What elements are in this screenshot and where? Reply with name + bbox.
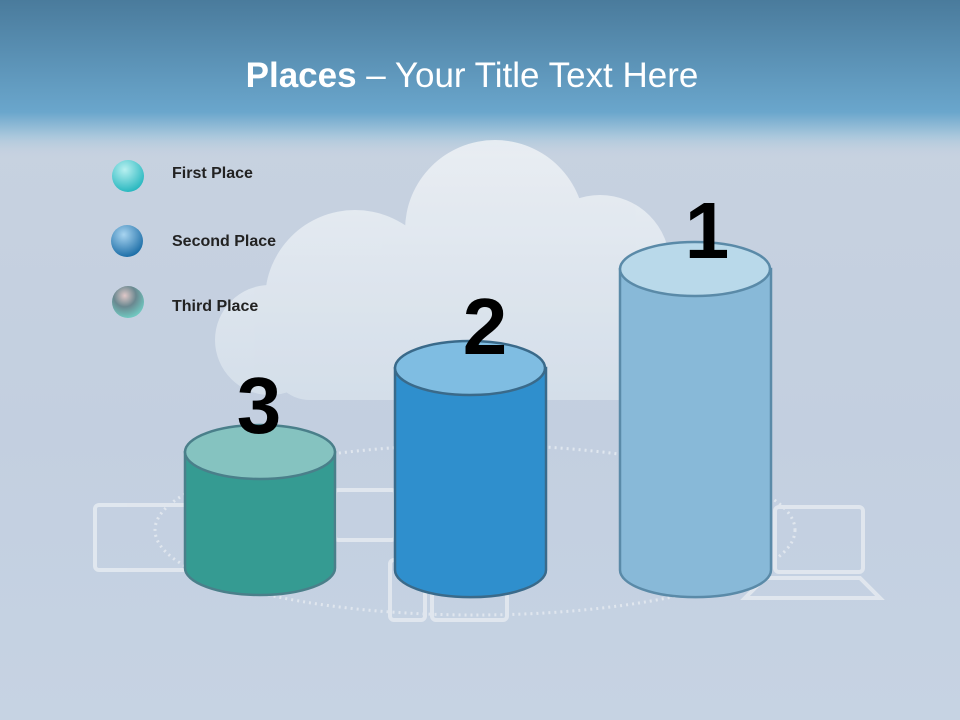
cylinder 1: 1 [685, 186, 729, 275]
cylinder 3: 3 [237, 361, 281, 450]
title: Places – Your Title Text Here [246, 56, 698, 95]
legend [111, 160, 276, 318]
legend: First Place [172, 165, 253, 182]
cylinder 2 [395, 282, 546, 597]
cylinder 2: 2 [463, 282, 507, 371]
cloud [215, 140, 670, 405]
legend: Third Place [172, 298, 258, 315]
legend: Second Place [172, 233, 276, 250]
devices and dotted ring [95, 445, 880, 620]
cylinder 1 [620, 186, 771, 597]
cylinder 3 [185, 361, 335, 595]
